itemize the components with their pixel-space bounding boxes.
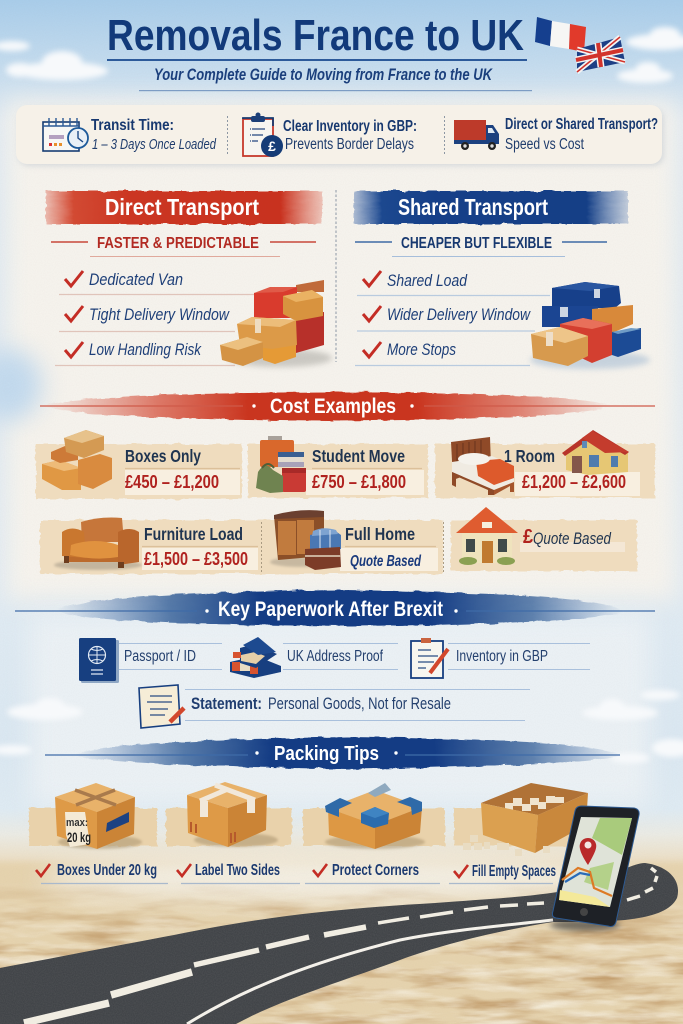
text: transit time: Transit Time: bbox=[91, 117, 174, 134]
tip: boxes under 20 kg bbox=[55, 783, 142, 849]
label: full home: Full Home bbox=[345, 524, 415, 544]
label: protect corners: Protect Corners bbox=[332, 862, 419, 879]
illustration: stacked boxes, blue and orange bbox=[530, 282, 650, 369]
label: protect corners bbox=[305, 862, 440, 884]
icon: French flag bbox=[535, 17, 586, 52]
list: direct transport benefits: Dedicated Van bbox=[89, 270, 183, 289]
subheading: cheaper but flexible: CHEAPER BUT FLEXIBLE bbox=[401, 235, 552, 252]
card: one room bbox=[435, 430, 655, 498]
text: passport: Passport / ID bbox=[124, 648, 196, 665]
icon: passport bbox=[79, 638, 119, 683]
heading: cost examples: Cost Examples bbox=[270, 395, 396, 418]
text: speed vs cost: Speed vs Cost bbox=[505, 136, 585, 153]
icon: smartphone with map bbox=[550, 806, 639, 931]
banner: direct transport bbox=[46, 191, 322, 224]
heading: key paperwork after Brexit bbox=[15, 590, 655, 626]
tip: boxes under 20 kg: max: bbox=[66, 817, 88, 829]
icon: inventory clipboard: £ bbox=[268, 138, 276, 154]
text: prevents delays: Prevents Border Delays bbox=[285, 136, 414, 153]
icon: cottage bbox=[456, 507, 518, 565]
heading: packing tips bbox=[45, 737, 620, 769]
clouds bbox=[0, 27, 683, 763]
price: quote based: Quote Based bbox=[350, 553, 421, 570]
panel: direct transport bbox=[46, 191, 332, 367]
subtitle rule bbox=[139, 90, 532, 91]
icon: inventory clipboard bbox=[243, 112, 283, 157]
text: transit days: 1 – 3 Days Once Loaded bbox=[92, 136, 216, 153]
icon: bed bbox=[451, 437, 514, 495]
tip: label two sides bbox=[187, 782, 278, 847]
subtitle: Your Complete Guide to Moving from France to the UK bbox=[154, 66, 493, 84]
icon: stacked books bbox=[230, 637, 281, 678]
banner: shared transport: Shared Transport bbox=[398, 194, 548, 220]
icon: wardrobe and boxes bbox=[270, 510, 341, 570]
icon: pile of boxes bbox=[42, 430, 112, 490]
list: shared transport benefits: Wider Delivery Window bbox=[387, 305, 531, 324]
icon: calendar and clock bbox=[43, 118, 88, 151]
card: furniture load bbox=[40, 518, 262, 574]
panel: paperwork items bbox=[79, 637, 590, 728]
label: boxes under 20 kg bbox=[36, 862, 168, 884]
label: quote based: Quote Based bbox=[533, 529, 611, 548]
text: clear inventory: Clear Inventory in GBP: bbox=[283, 118, 417, 135]
panel: packing tips bbox=[36, 782, 588, 884]
banner: shared transport bbox=[354, 191, 628, 224]
list: direct transport benefits: Low Handling Risk bbox=[89, 340, 202, 359]
list: shared transport benefits: More Stops bbox=[387, 340, 456, 359]
road edge line bbox=[187, 920, 553, 1024]
list: shared transport benefits: Shared Load bbox=[387, 271, 467, 290]
panel: shared transport bbox=[354, 191, 650, 369]
label: fill empty spaces bbox=[449, 863, 556, 884]
icon: inventory clipboard and pen bbox=[411, 638, 448, 678]
price: furniture load: £1,500 – £3,500 bbox=[144, 549, 248, 569]
tip: boxes under 20 kg: 20 kg bbox=[67, 829, 91, 845]
symbol: pound: £ bbox=[523, 526, 533, 548]
price: student move: £750 – £1,800 bbox=[312, 472, 406, 492]
icon: luggage and books bbox=[256, 436, 306, 493]
label: label two sides bbox=[177, 862, 300, 884]
heading: key paperwork after Brexit: Key Paperwork After Brexit bbox=[218, 598, 443, 621]
icon: armchair bbox=[54, 518, 142, 570]
label: furniture load: Furniture Load bbox=[144, 524, 243, 544]
card: full home bbox=[262, 510, 444, 574]
title rule bbox=[107, 59, 527, 61]
list: direct transport benefits bbox=[55, 270, 255, 366]
label: boxes only: Boxes Only bbox=[125, 446, 201, 466]
icon: statement document and pen bbox=[139, 685, 184, 728]
list: shared transport benefits bbox=[355, 271, 550, 366]
tip: protect corners bbox=[325, 783, 425, 849]
road bbox=[0, 860, 683, 1024]
heading: packing tips: Packing Tips bbox=[274, 743, 379, 765]
label: boxes under 20 kg: Boxes Under 20 kg bbox=[57, 862, 157, 879]
icon: small house bbox=[562, 430, 629, 475]
text: inventory in GBP: Inventory in GBP bbox=[456, 648, 548, 665]
text: statement: Statement: bbox=[191, 695, 262, 713]
subheading: faster and predictable: FASTER & PREDICTABLE bbox=[97, 235, 259, 252]
swatches: sand behind packing icons bbox=[29, 808, 579, 846]
label: fill empty spaces: Fill Empty Spaces bbox=[472, 863, 556, 880]
panel: quick facts bbox=[16, 105, 664, 166]
text: personal goods: Personal Goods, Not for Resale bbox=[268, 695, 451, 713]
price: boxes only: £450 – £1,200 bbox=[125, 472, 219, 492]
tip: fill empty spaces bbox=[463, 783, 588, 856]
card: quote based home bbox=[451, 507, 637, 571]
list: direct transport benefits: Tight Delivery Window bbox=[89, 305, 230, 324]
card: student move bbox=[248, 436, 428, 498]
label: student move: Student Move bbox=[312, 446, 405, 466]
icon: removal truck bbox=[454, 120, 499, 150]
title: Removals France to UK bbox=[107, 11, 524, 60]
icon: UK flag bbox=[576, 37, 625, 72]
label: one room: 1 Room bbox=[504, 446, 555, 466]
label: label two sides: Label Two Sides bbox=[195, 862, 280, 879]
heading: cost examples bbox=[40, 392, 655, 421]
text: UK address proof: UK Address Proof bbox=[287, 648, 384, 665]
card: boxes only bbox=[36, 430, 242, 499]
banner: direct transport: Direct Transport bbox=[105, 194, 259, 220]
price: one room: £1,200 – £2,600 bbox=[522, 472, 626, 492]
illustration: stacked boxes, red and orange bbox=[220, 280, 332, 367]
